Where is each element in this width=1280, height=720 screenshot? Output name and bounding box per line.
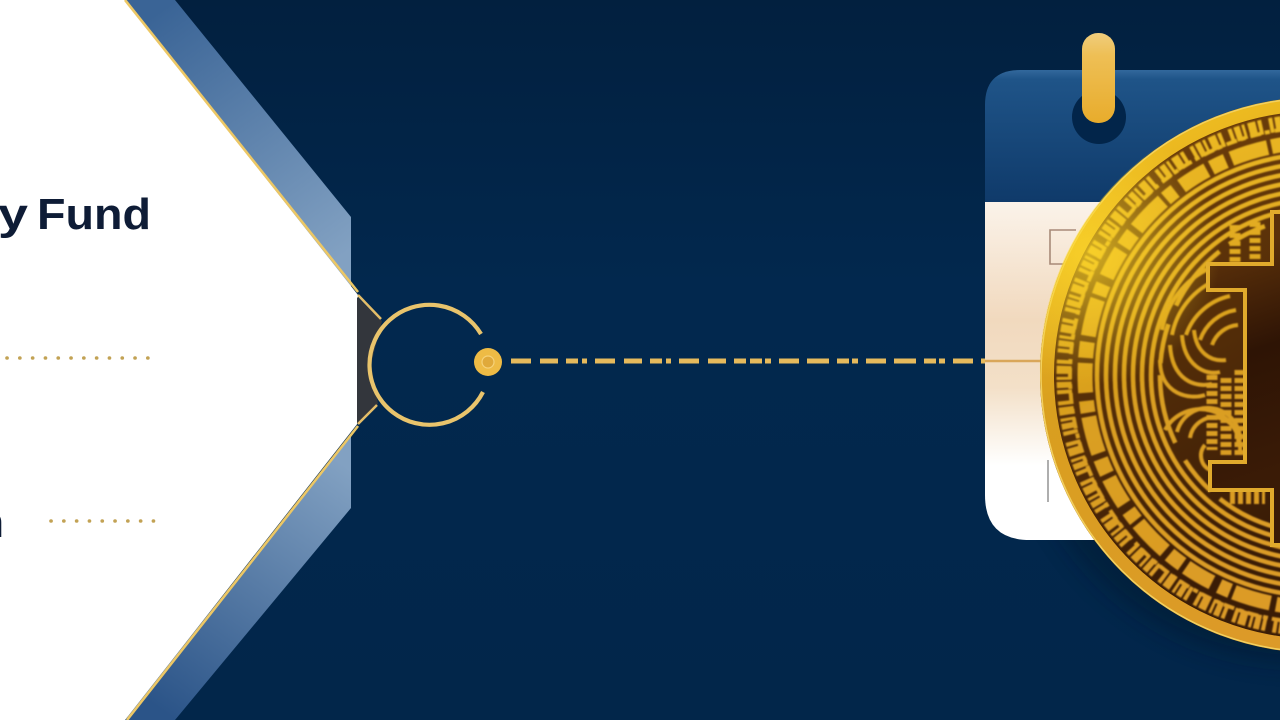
binder peg xyxy=(1082,33,1115,123)
thin connector across page xyxy=(985,360,1045,362)
left panel with blue bands xyxy=(0,0,358,720)
heading fragment: Fund xyxy=(37,190,151,239)
swirl arcs xyxy=(1160,268,1240,470)
white panel xyxy=(0,0,358,720)
lower blue band xyxy=(124,435,351,720)
bitcoin symbol xyxy=(1208,212,1280,545)
coin face xyxy=(1040,97,1280,653)
dotted leader one xyxy=(7,356,157,360)
lower date cell edge xyxy=(1047,460,1049,502)
rim highlight xyxy=(1041,98,1280,652)
gold dot centre xyxy=(482,356,494,368)
upper blue band xyxy=(124,0,351,290)
raised segment ring xyxy=(1085,142,1280,608)
binder hole xyxy=(1072,90,1126,144)
gold dot xyxy=(474,348,502,376)
gold panel edges xyxy=(125,0,358,720)
coin shadow xyxy=(1018,107,1280,663)
open gold ring xyxy=(370,305,483,425)
gold wedge edges xyxy=(358,295,381,424)
bitcoin coin xyxy=(1040,100,1280,650)
concentric rings xyxy=(1097,154,1280,596)
calendar page xyxy=(985,201,1280,540)
micro lettering ring xyxy=(1064,121,1280,629)
dark wedge xyxy=(357,297,382,424)
coin details xyxy=(1064,121,1280,629)
coin rim xyxy=(1047,104,1280,646)
calendar header xyxy=(985,70,1280,202)
calendar xyxy=(985,33,1280,540)
dotted leader two xyxy=(51,519,158,523)
dashed connector line xyxy=(511,358,985,364)
connector node xyxy=(357,295,502,425)
date cell outline xyxy=(1050,230,1076,264)
dotted texture by stem xyxy=(1212,222,1265,497)
coin highlight xyxy=(1040,150,1211,376)
